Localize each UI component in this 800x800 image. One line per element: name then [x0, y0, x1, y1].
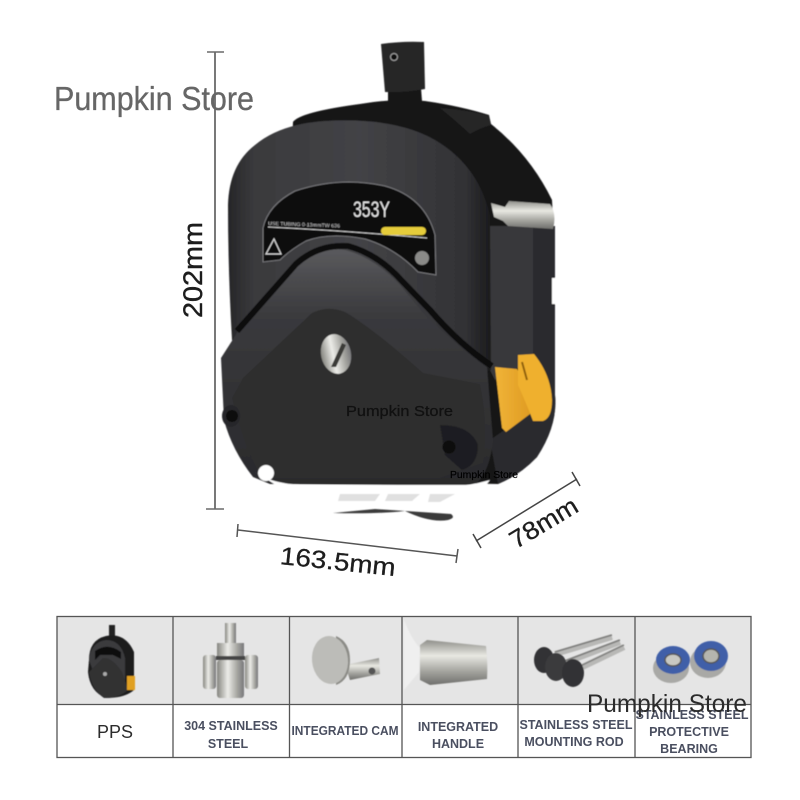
thumbnail: steel rotor: [203, 623, 258, 698]
round logo: [415, 251, 429, 265]
yellow indicator bar: [381, 227, 426, 235]
thumbnail: bearings: [653, 641, 728, 683]
table image row background: [57, 617, 751, 705]
yellow latch: [495, 354, 552, 432]
caption: mounting rod: MOUNTING ROD: [524, 735, 624, 749]
thumbnail: mounting rods: [534, 635, 624, 687]
table grid: [57, 616, 751, 758]
lower cover inner plate: [232, 309, 485, 478]
thumbnail: integrated cam: [310, 634, 380, 686]
model number: 353Y: [353, 197, 390, 222]
height label: 202mm: [178, 222, 208, 318]
depth label: 78mm: [505, 492, 583, 554]
caption: protective bearing: BEARING: [660, 742, 718, 756]
housing notch: [552, 278, 557, 304]
warning triangle icon: [266, 239, 281, 254]
faded base reflection: [255, 465, 490, 521]
cover right screw hole: [440, 425, 478, 470]
rear housing side strip: [490, 226, 555, 484]
watermark: top left: Pumpkin Store: [54, 80, 254, 117]
cover centre screw: [317, 331, 355, 377]
pump shaft handle: [381, 42, 425, 101]
watermark: small: Pumpkin Store: [450, 470, 518, 481]
steel side pin: [491, 201, 554, 229]
table caption row background: [57, 705, 751, 758]
pump front face: [228, 120, 491, 420]
thumbnail: PPS pump: [88, 625, 135, 698]
watermark: centre: Pumpkin Store: [346, 403, 453, 420]
caption: integrated handle: HANDLE: [432, 737, 484, 751]
width dimension line: [237, 524, 458, 563]
materials table: [57, 616, 751, 758]
plate divider: [268, 227, 427, 238]
tubing note: USE TUBING 0-13mmTW 636: [268, 221, 340, 230]
watermark: bottom right: Pumpkin Store: [587, 690, 747, 718]
cover shadow groove: [237, 246, 492, 366]
caption: protective bearing: STAINLESS STEEL: [636, 708, 749, 722]
rear housing lower panel: [490, 226, 533, 380]
pump rear housing: [290, 100, 555, 484]
depth dimension line: [473, 472, 580, 548]
caption: PPS: PPS: [97, 722, 133, 742]
caption: 304 stainless steel: 304 STAINLESS: [184, 719, 278, 733]
caption: protective bearing: PROTECTIVE: [649, 725, 729, 739]
pump product illustration: [221, 42, 557, 521]
caption: integrated cam: INTEGRATED CAM: [292, 724, 398, 738]
caption: mounting rod: STAINLESS STEEL: [520, 718, 633, 732]
pump label plate: [263, 182, 436, 275]
width label: 163.5mm: [279, 542, 397, 582]
thumbnail: integrated handle: [404, 620, 487, 690]
caption: 304 stainless steel: STEEL: [208, 737, 248, 751]
height dimension line: [206, 52, 224, 509]
rear housing upper sheen: [440, 108, 491, 134]
pump lower cover outer: [221, 249, 493, 486]
cover left screw hole: [222, 405, 240, 427]
caption: integrated handle: INTEGRATED: [418, 720, 498, 734]
